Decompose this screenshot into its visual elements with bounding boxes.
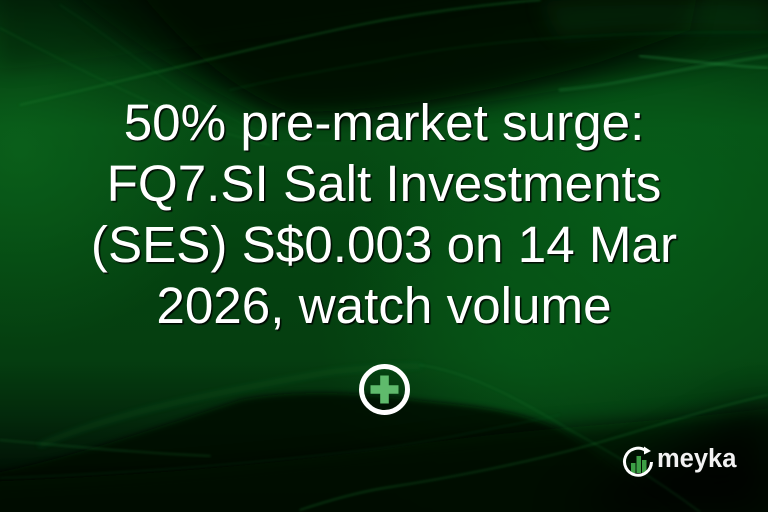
top dark mass [60, 0, 768, 119]
icon: plus in circle [359, 364, 410, 415]
title: (SES) S$0.003 on 14 Mar [91, 216, 677, 273]
title [91, 94, 678, 334]
title: 50% pre-market surge: [124, 94, 644, 151]
bottom dark mass [0, 393, 700, 512]
logo: meyka: meyka [657, 445, 736, 473]
title: FQ7.SI Salt Investments [107, 155, 661, 212]
logo: meyka [622, 445, 737, 477]
title: 2026, watch volume [156, 277, 612, 334]
